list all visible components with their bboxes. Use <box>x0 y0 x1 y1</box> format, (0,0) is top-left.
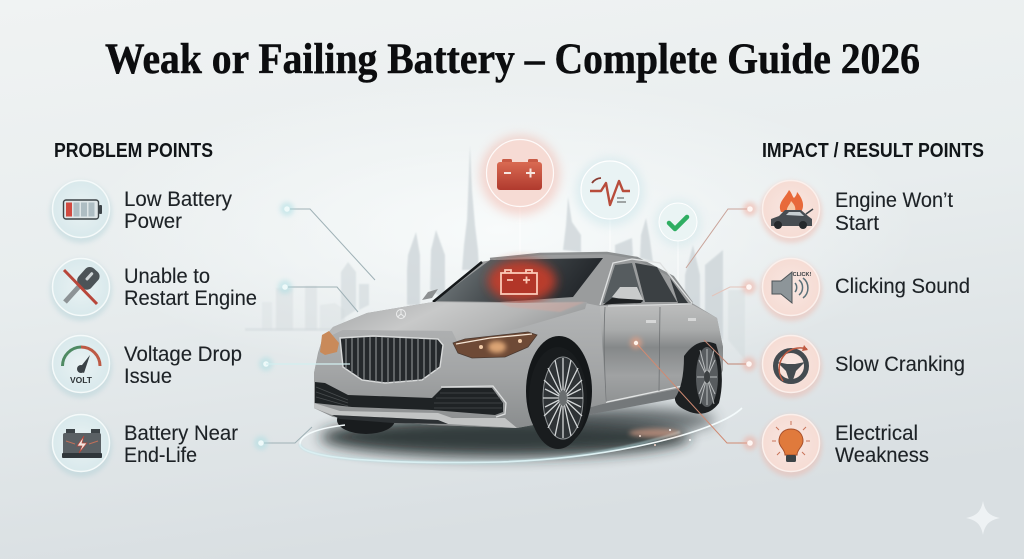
A pillar <box>433 262 482 302</box>
windshield <box>435 258 603 302</box>
belt chrome <box>608 304 692 306</box>
side windows <box>603 263 643 303</box>
lower sill <box>587 387 687 415</box>
item: electrical weakness: Electrical <box>835 422 918 445</box>
item: electrical weakness <box>760 414 929 477</box>
item: battery near end-life: Battery Near <box>124 422 238 445</box>
item: battery near end-life <box>50 414 238 477</box>
lower intake <box>315 382 503 415</box>
car body base <box>314 253 723 428</box>
car <box>314 253 723 449</box>
left mirror <box>422 289 438 300</box>
lower splitter <box>332 415 448 424</box>
item: unable to restart engine: Unable to <box>124 265 210 288</box>
item: electrical weakness: Weakness <box>835 444 929 467</box>
item: slow cranking <box>760 336 965 398</box>
grille <box>340 336 443 383</box>
item: slow cranking: Slow Cranking <box>835 353 965 376</box>
panel: impact / result points <box>760 139 984 477</box>
spark dot on door <box>630 337 642 349</box>
dashboard battery warning <box>501 270 537 294</box>
headlight right <box>453 332 537 358</box>
icon: green check <box>655 200 701 280</box>
leader lines: impact side <box>636 209 750 443</box>
item: low battery power: Low Battery <box>124 188 232 211</box>
sill chrome <box>593 385 687 405</box>
item: low battery power <box>50 180 232 243</box>
heading: impact / result points: IMPACT / RESULT POINTS <box>762 139 984 162</box>
side panel <box>592 305 723 406</box>
side mirror <box>612 287 643 300</box>
item: engine won't start: Engine Won’t <box>835 189 953 212</box>
far front wheel <box>337 406 395 434</box>
item: low battery power: Power <box>124 210 182 233</box>
leader dots: problem side <box>254 202 294 450</box>
door handles <box>646 318 696 323</box>
front fascia and fender <box>314 303 606 428</box>
door seams <box>604 307 660 402</box>
roof edge <box>490 253 692 303</box>
bumper lip <box>314 403 517 428</box>
floor sparks <box>629 428 691 446</box>
watermark: sparkle <box>966 501 1000 535</box>
item: clicking sound: CLICK! <box>793 272 811 278</box>
icon: heartbeat diagnostic <box>576 158 644 250</box>
rear wheel <box>675 342 722 414</box>
item: voltage drop issue: Issue <box>124 365 172 388</box>
item: engine won't start: Start <box>835 212 879 235</box>
item: voltage drop issue: Voltage Drop <box>124 343 242 366</box>
item: voltage drop issue: VOLT <box>70 375 93 385</box>
item: clicking sound: Clicking Sound <box>835 275 970 298</box>
front wheel arch <box>526 336 592 446</box>
item: battery near end-life: End-Life <box>124 444 197 467</box>
front wheel <box>529 347 587 449</box>
item: clicking sound <box>760 258 970 321</box>
mercedes emblem <box>396 310 406 318</box>
voltage leader beam <box>266 363 350 365</box>
item: engine won't start <box>760 180 953 243</box>
leader lines: problem side <box>261 209 375 443</box>
icon: top battery alert <box>480 135 560 266</box>
panel: problem points <box>50 139 257 477</box>
floor shadow <box>320 407 715 457</box>
city skyline <box>262 145 745 360</box>
hood <box>322 302 587 341</box>
holographic floor ring <box>300 408 742 462</box>
windshield red glow <box>488 260 556 302</box>
item: unable to restart engine: Restart Engine <box>124 287 257 310</box>
hood pink reflection <box>500 302 585 312</box>
title: Weak or Failing Battery – Complete Guide 2026 <box>105 36 920 83</box>
item: unable to restart engine <box>50 258 257 321</box>
item: voltage drop issue <box>50 336 242 398</box>
heading: problem points: PROBLEM POINTS <box>54 139 213 162</box>
leader dots: impact side <box>742 202 757 450</box>
headlight left <box>320 331 339 355</box>
